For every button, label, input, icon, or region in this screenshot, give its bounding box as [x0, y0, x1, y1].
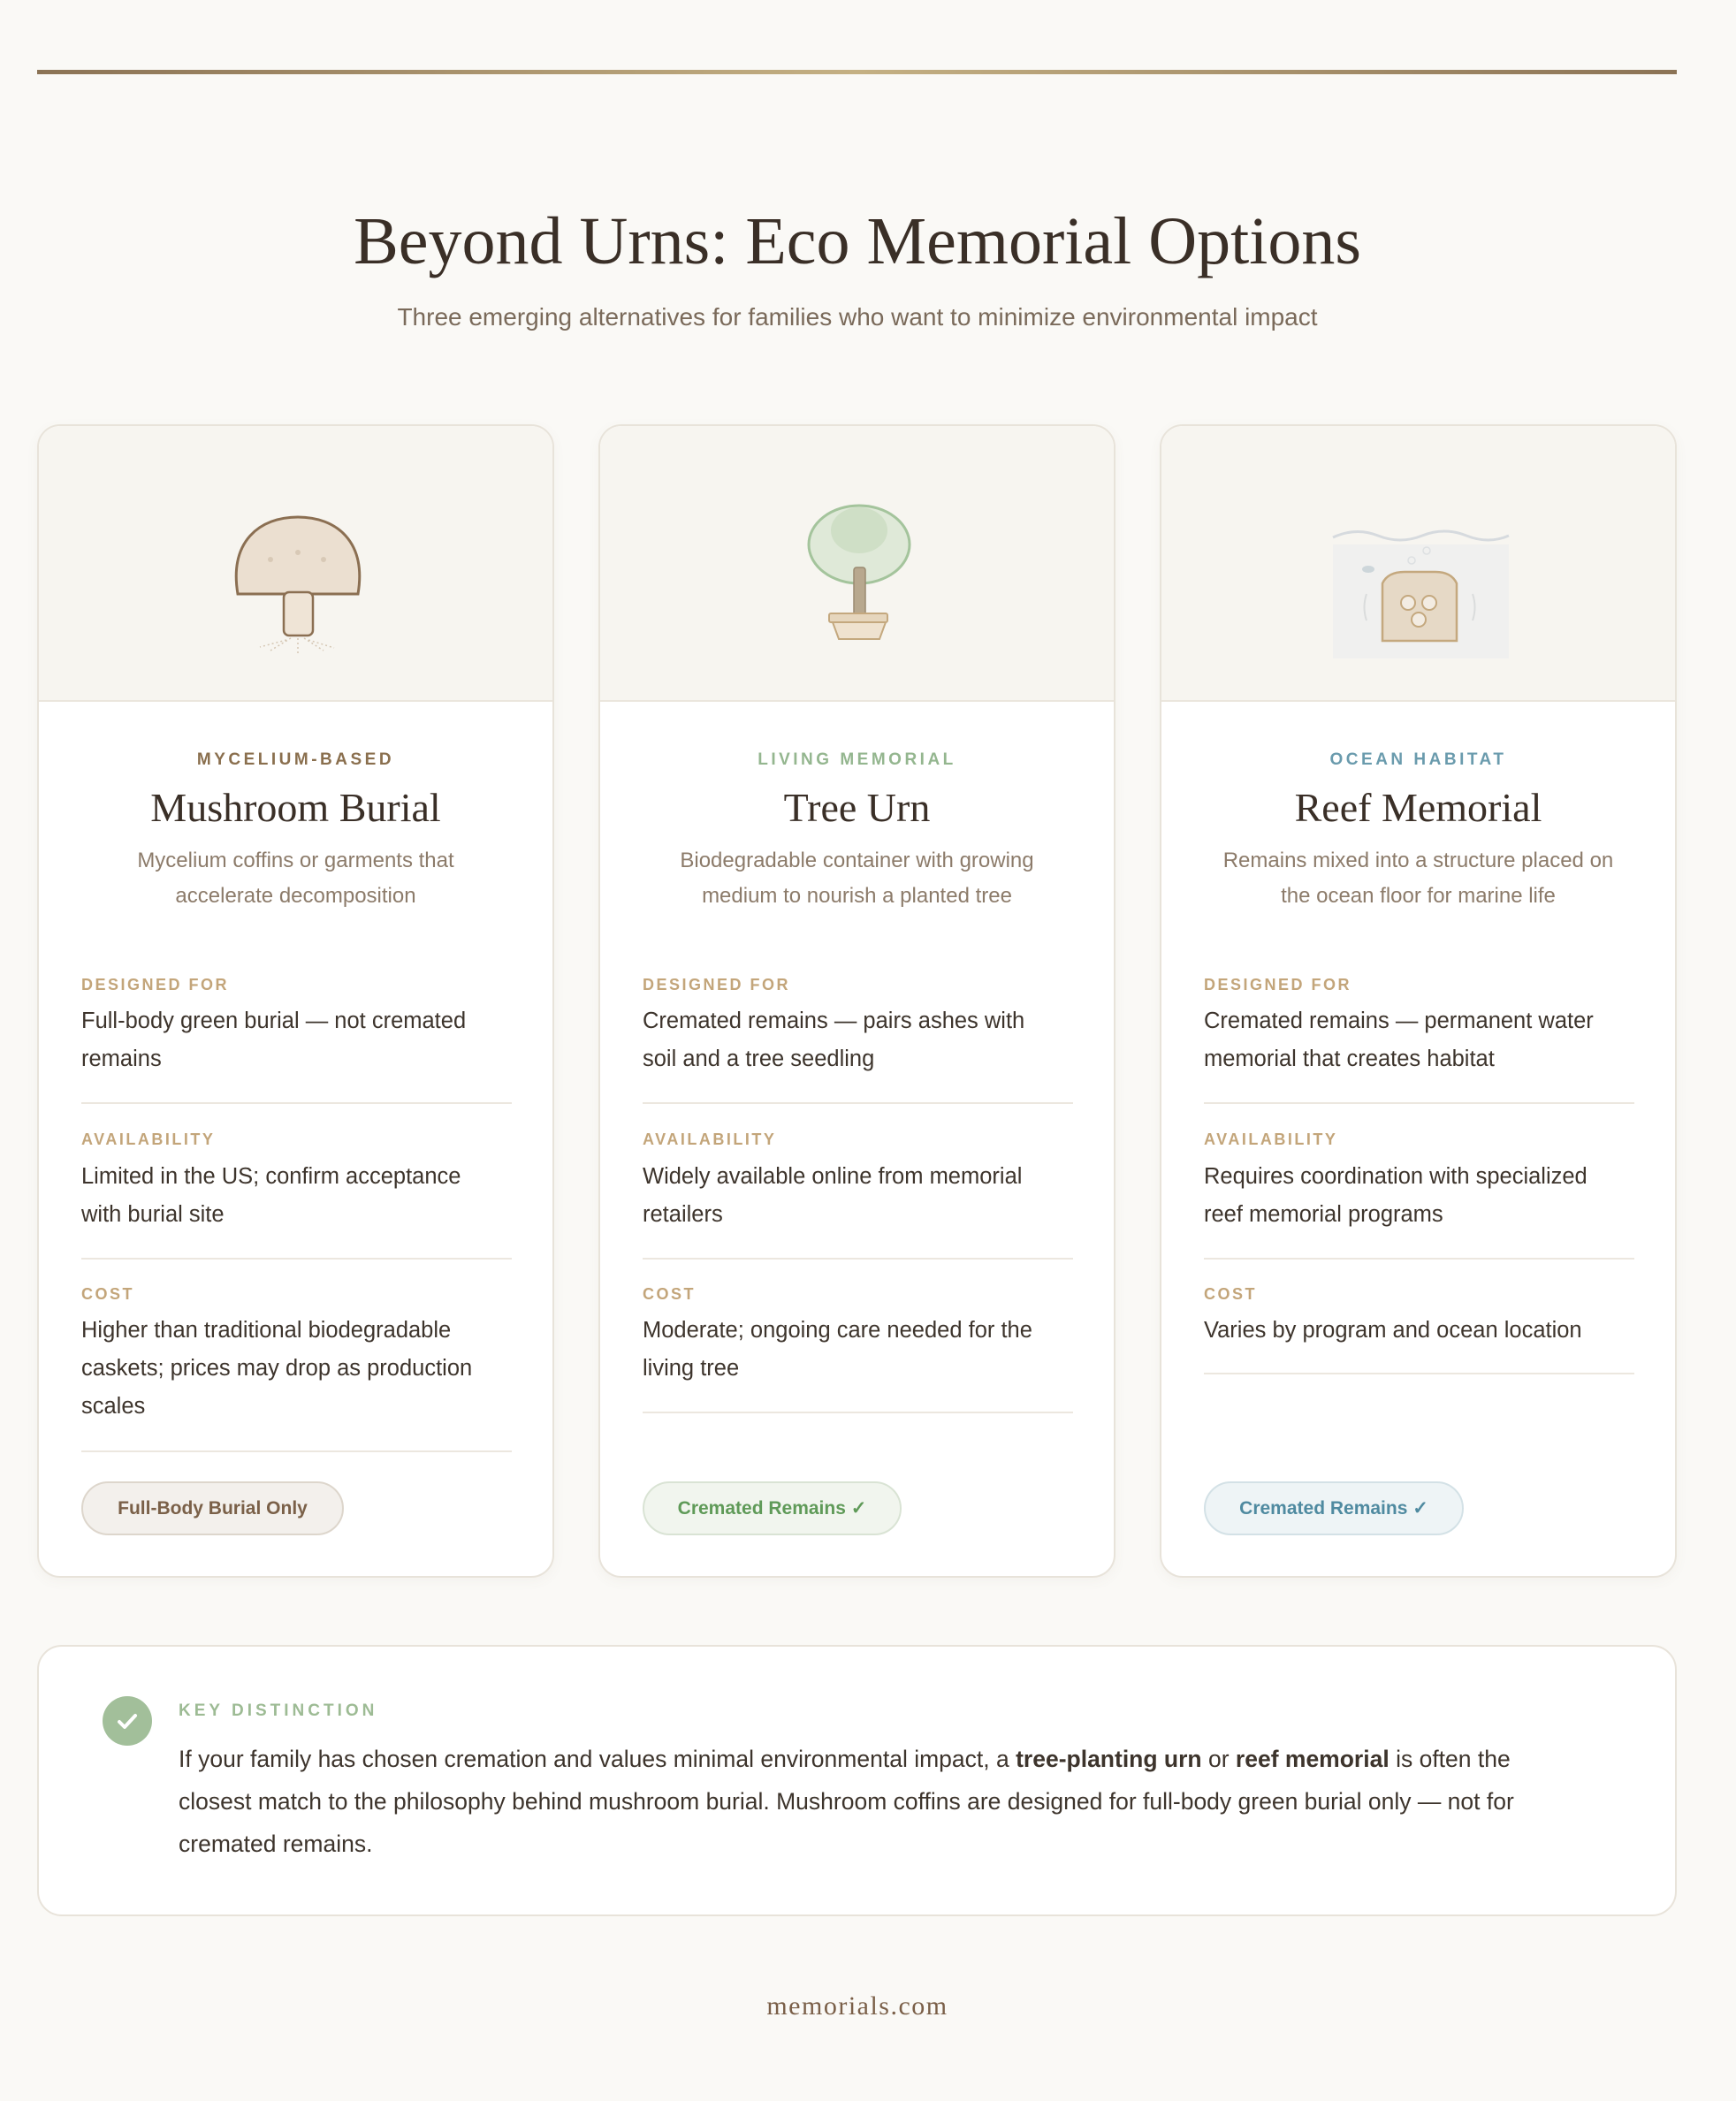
- title: Beyond Urns: Eco Memorial Options: [354, 204, 1361, 278]
- badge: [643, 1481, 902, 1535]
- badge: [81, 1481, 344, 1535]
- text: designed for: Cremated remains — pairs ashes with: [643, 1009, 1024, 1033]
- card title: Mushroom Burial: [150, 785, 441, 830]
- text: availability: Requires coordination with specialized: [1204, 1164, 1588, 1189]
- badge: Cremated Remains ✓: [1239, 1498, 1428, 1519]
- label: cost: COST: [643, 1285, 696, 1303]
- callout: key distinction: [37, 1645, 1677, 1916]
- text: cost: caskets; prices may drop as production: [81, 1356, 472, 1381]
- icon: reef: [1161, 426, 1675, 702]
- description: [680, 849, 1034, 908]
- badge: [1204, 1481, 1464, 1535]
- text: cost: [81, 1318, 472, 1419]
- card title: Reef Memorial: [1295, 785, 1542, 830]
- tag: LIVING MEMORIAL: [758, 750, 956, 769]
- callout text: cremated remains.: [179, 1831, 372, 1857]
- text: cost: Varies by program and ocean location: [1204, 1318, 1582, 1343]
- label: designed for: DESIGNED FOR: [643, 976, 790, 993]
- text: cost: [643, 1318, 1032, 1381]
- label: cost: COST: [1204, 1285, 1257, 1303]
- footer: memorials.com: [766, 1991, 948, 2021]
- callout text: If your family has chosen cremation and values minimal environmental impact, a tree-planting urn or reef memorial is often the: [179, 1746, 1511, 1772]
- text: designed for: [81, 1009, 466, 1071]
- description: [137, 849, 454, 908]
- text: designed for: soil and a tree seedling: [643, 1047, 874, 1071]
- icon: check circle: [103, 1696, 152, 1746]
- label: designed for: DESIGNED FOR: [81, 976, 229, 993]
- panel: tree urn: [598, 424, 1115, 1578]
- text: availability: [643, 1164, 1022, 1227]
- panel: reef memorial: [1160, 424, 1677, 1578]
- tag: MYCELIUM-BASED: [197, 750, 394, 769]
- text: designed for: remains: [81, 1047, 162, 1071]
- text: cost: living tree: [643, 1356, 739, 1381]
- text: designed for: Cremated remains — permanent water: [1204, 1009, 1594, 1033]
- text: designed for: memorial that creates habitat: [1204, 1047, 1495, 1071]
- text: availability: with burial site: [81, 1202, 225, 1227]
- text: cost: Higher than traditional biodegradable: [81, 1318, 451, 1343]
- card title: Tree Urn: [784, 785, 930, 830]
- text: cost: Moderate; ongoing care needed for the: [643, 1318, 1032, 1343]
- top rule: [37, 70, 1677, 74]
- tag: OCEAN HABITAT: [1330, 750, 1506, 769]
- label: availability: AVAILABILITY: [81, 1130, 215, 1148]
- text: designed for: Full-body green burial — not cremated: [81, 1009, 466, 1033]
- icon: tree: [600, 426, 1114, 702]
- description: accelerate decomposition: [175, 884, 416, 908]
- description: medium to nourish a planted tree: [702, 884, 1012, 908]
- panel: mushroom burial: [37, 424, 554, 1578]
- text: availability: reef memorial programs: [1204, 1202, 1443, 1227]
- description: Mycelium coffins or garments that: [137, 849, 454, 872]
- description: Biodegradable container with growing: [680, 849, 1034, 872]
- text: designed for: [643, 1009, 1024, 1071]
- callout text: closest match to the philosophy behind mushroom burial. Mushroom coffins are designed for full-body green burial only — not for: [179, 1788, 1514, 1815]
- callout label: KEY DISTINCTION: [179, 1701, 377, 1720]
- text: availability: [1204, 1164, 1588, 1227]
- callout text: [179, 1746, 1514, 1857]
- icon: mushroom: [39, 426, 552, 702]
- text: availability: [81, 1164, 461, 1227]
- text: availability: Limited in the US; confirm acceptance: [81, 1164, 461, 1189]
- text: cost: scales: [81, 1394, 145, 1419]
- badge: Full-Body Burial Only: [118, 1498, 308, 1519]
- subtitle: Three emerging alternatives for families who want to minimize environmental impact: [397, 303, 1318, 331]
- description: Remains mixed into a structure placed on: [1223, 849, 1613, 872]
- text: availability: retailers: [643, 1202, 723, 1227]
- label: availability: AVAILABILITY: [643, 1130, 776, 1148]
- label: cost: COST: [81, 1285, 134, 1303]
- label: designed for: DESIGNED FOR: [1204, 976, 1351, 993]
- badge: Cremated Remains ✓: [678, 1498, 866, 1519]
- label: availability: AVAILABILITY: [1204, 1130, 1337, 1148]
- text: designed for: [1204, 1009, 1594, 1071]
- description: [1223, 849, 1613, 908]
- description: the ocean floor for marine life: [1281, 884, 1556, 908]
- text: availability: Widely available online from memorial: [643, 1164, 1022, 1189]
